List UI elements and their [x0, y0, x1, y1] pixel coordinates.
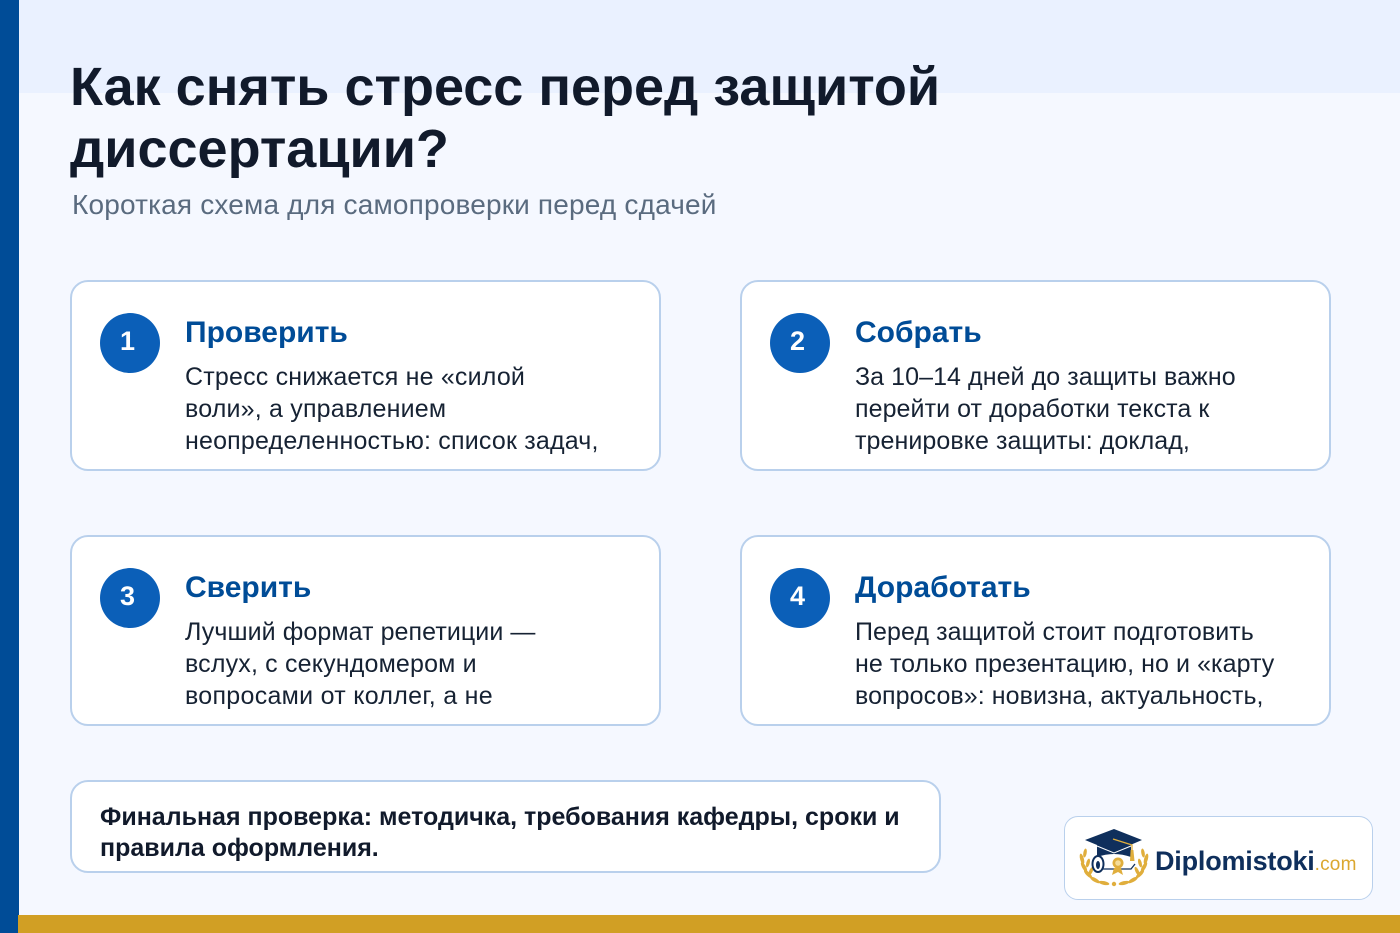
number badge 2: 2 — [790, 326, 805, 356]
text: step 1: Стресс снижается не «силой — [185, 363, 525, 391]
text: step 4: не только презентацию, но и «карту — [855, 650, 1274, 678]
number badge 1 — [100, 313, 160, 373]
text: step 2: перейти от доработки текста к — [855, 395, 1209, 423]
panel: step 2 — [740, 280, 1331, 471]
bottom gold bar — [18, 915, 1400, 933]
number badge 1: 1 — [120, 326, 135, 356]
callout text: правила оформления. — [100, 834, 379, 862]
text: step 2: тренировке защиты: доклад, — [855, 427, 1190, 455]
title — [70, 57, 940, 179]
subtitle: Короткая схема для самопроверки перед сдачей — [72, 189, 717, 220]
number badge 4: 4 — [790, 581, 805, 611]
logo icon: graduation cap with laurel — [1080, 829, 1148, 886]
text: step 4: вопросов»: новизна, актуальность, — [855, 682, 1264, 710]
text: step 2 — [855, 363, 1236, 455]
text: step 3: вслух, с секундомером и — [185, 650, 477, 678]
title: диссертации? — [70, 119, 449, 179]
left accent bar — [0, 0, 19, 933]
number badge 3: 3 — [120, 581, 135, 611]
heading: step 2: Собрать — [855, 316, 982, 349]
text: step 3: вопросами от коллег, а не — [185, 682, 493, 710]
title: Как снять стресс перед защитой — [70, 57, 940, 117]
callout text: Финальная проверка: методичка, требования кафедры, сроки и — [100, 803, 900, 831]
number badge 3 — [100, 568, 160, 628]
number badge 2 — [770, 313, 830, 373]
logo card — [1064, 816, 1373, 900]
logo wordmark: Diplomistoki.com — [1155, 846, 1357, 876]
text: step 1 — [185, 363, 599, 455]
text: step 1: воли», а управлением — [185, 395, 446, 423]
panel: step 4 — [740, 535, 1331, 726]
panel: final check callout — [70, 780, 941, 873]
text: step 3: Лучший формат репетиции — — [185, 618, 536, 646]
text: step 4: Перед защитой стоит подготовить — [855, 618, 1254, 646]
text: step 3 — [185, 618, 536, 710]
panel: step 1 — [70, 280, 661, 471]
heading: step 1: Проверить — [185, 316, 348, 349]
heading: step 3: Сверить — [185, 571, 311, 604]
callout text — [100, 803, 900, 862]
text: step 2: За 10–14 дней до защиты важно — [855, 363, 1236, 391]
text: step 1: неопределенностью: список задач, — [185, 427, 599, 455]
number badge 4 — [770, 568, 830, 628]
top header band — [18, 0, 1400, 93]
text: step 4 — [855, 618, 1274, 710]
heading: step 4: Доработать — [855, 571, 1031, 604]
panel: step 3 — [70, 535, 661, 726]
